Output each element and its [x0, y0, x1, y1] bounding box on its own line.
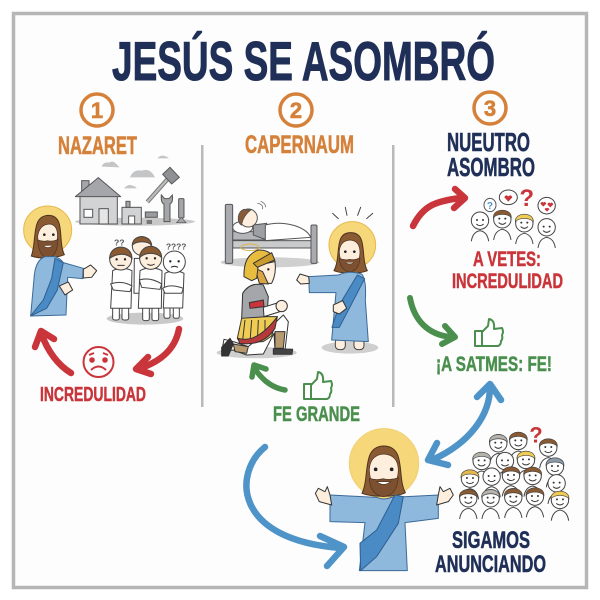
- heading: Nueutro Asombro: [447, 127, 535, 182]
- divider left: [201, 145, 204, 407]
- illustration: Jesus open arms: [315, 429, 453, 571]
- badge: number 1: [81, 94, 113, 126]
- illustration: doubting crowd: ??: [114, 237, 125, 247]
- label: a vetes incredulidad: A VETES:: [473, 248, 541, 271]
- arrow: blue curve: [246, 447, 344, 566]
- illustration: doubting crowd: [107, 237, 186, 325]
- badge: number 2: [280, 94, 312, 126]
- panel: sigamos anunciando: [246, 384, 569, 578]
- divider right: [392, 145, 394, 407]
- arrow: blue double: [428, 384, 501, 465]
- illustration: Jesus with rays: [297, 207, 378, 354]
- illustration: reacting people: [471, 185, 555, 248]
- label: fe grande: FE GRANDE: [273, 403, 360, 426]
- illustration: sick servant in bed: [221, 201, 319, 267]
- illustration: doubting crowd: ????: [166, 241, 186, 251]
- panel: Capernaum: [217, 94, 378, 426]
- arrow: green to thumb: [410, 298, 455, 344]
- label: sigamos anunciando: SIGAMOS: [452, 527, 530, 554]
- heading: Nueutro Asombro: ASOMBRO: [447, 152, 535, 182]
- illustration: village and tools: [75, 156, 195, 226]
- illustration: reacting people: ?: [519, 185, 534, 212]
- icon: thumbs up: [304, 372, 332, 399]
- illustration: crowd: [459, 423, 569, 521]
- illustration: reacting people: ?: [487, 201, 493, 212]
- arrow: red to faces: [413, 189, 465, 226]
- illustration: kneeling centurion: [217, 244, 297, 358]
- badge: number 3: [474, 92, 506, 124]
- icon: thumbs up: [475, 319, 503, 346]
- illustration: Jesus speaking: [24, 206, 97, 316]
- label: sigamos anunciando: ANUNCIANDO: [435, 551, 546, 578]
- label: a vetes incredulidad: [452, 248, 563, 293]
- illustration: crowd: ?: [529, 423, 543, 448]
- arrow: green to centurion: [252, 365, 285, 390]
- arrow: red left: [35, 331, 71, 373]
- label: a satmes fe: ¡A SATMES: FE!: [436, 353, 552, 376]
- panel: nuestro asombro: [410, 92, 563, 376]
- heading: Nazaret: NAZARET: [58, 132, 137, 160]
- label: sigamos anunciando: [435, 527, 546, 578]
- heading: Capernaum: CAPERNAUM: [245, 131, 354, 159]
- label: incredulidad: INCREDULIDAD: [40, 383, 146, 406]
- panel: Nazaret: [24, 94, 195, 406]
- icon: sad face: [84, 347, 114, 377]
- arrow: red right: [136, 329, 179, 374]
- badge: number 2: 2: [290, 98, 302, 123]
- badge: number 1: 1: [91, 98, 103, 123]
- badge: number 3: 3: [484, 96, 496, 121]
- heading: Nueutro Asombro: NUEUTRO: [447, 127, 530, 157]
